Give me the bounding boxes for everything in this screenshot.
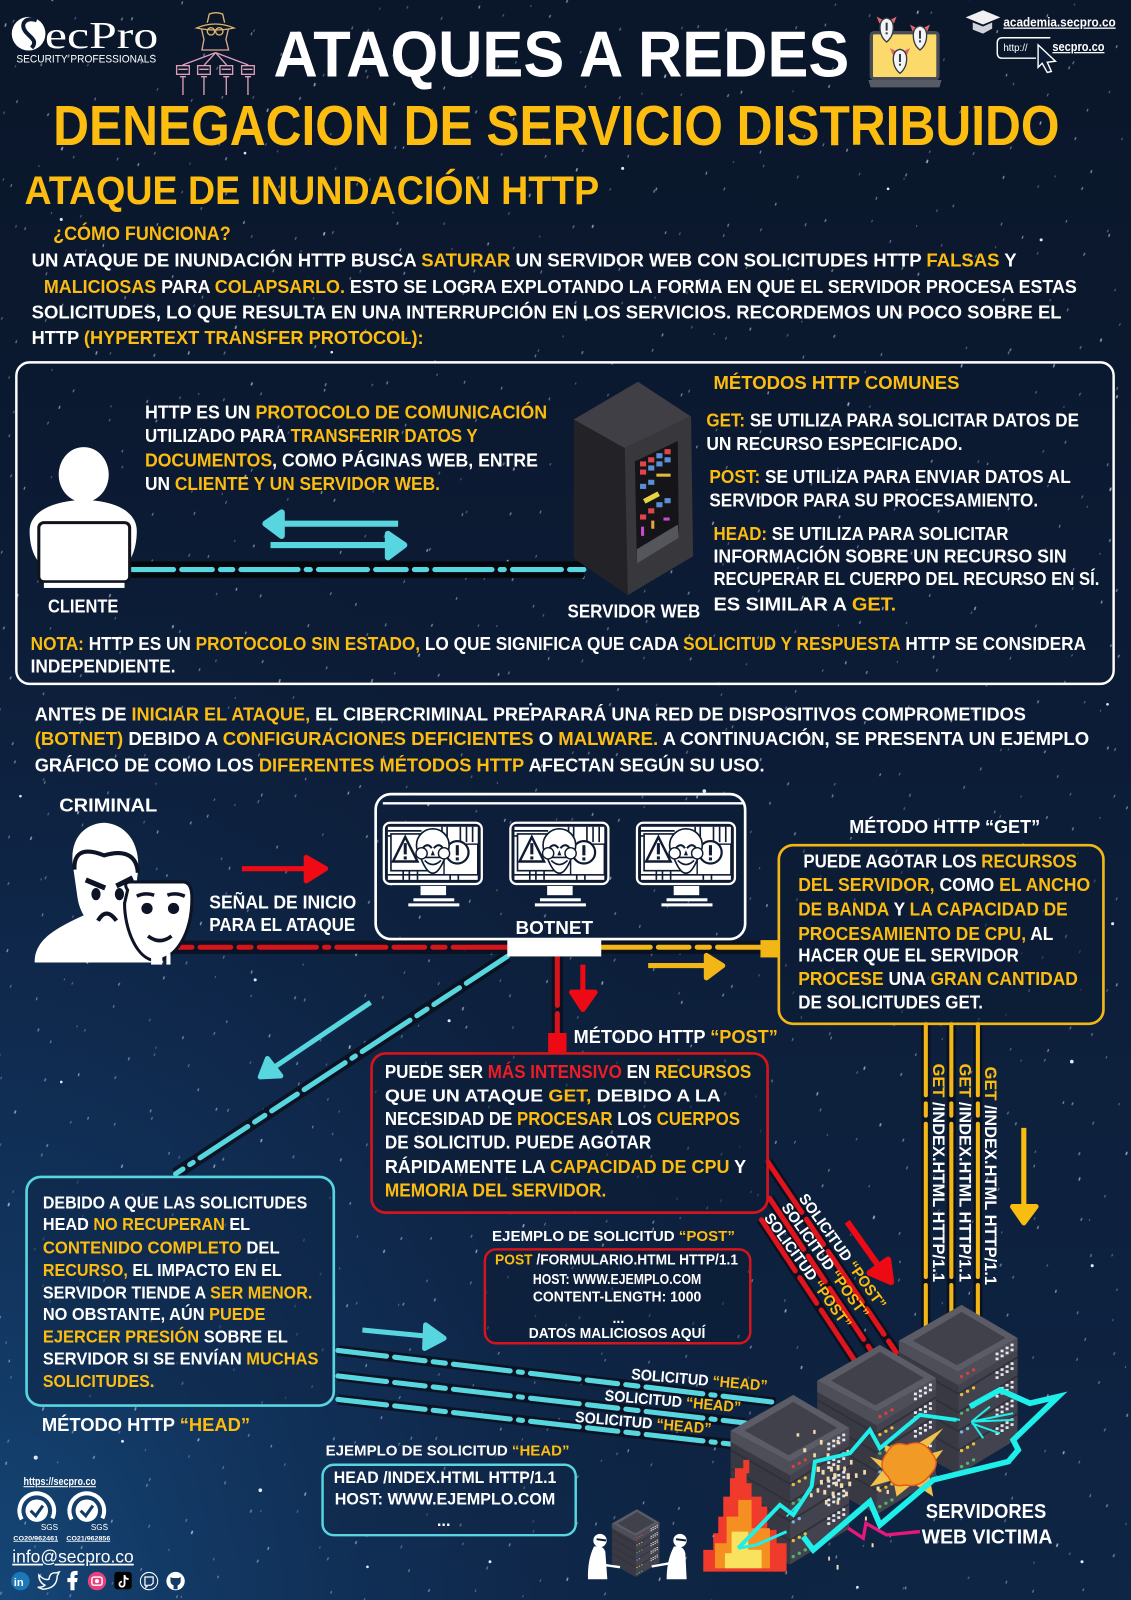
label: servidor web: SERVIDOR WEB (568, 601, 700, 622)
line: cyan botnet to HEAD (176, 956, 507, 1174)
panel: POST method: QUE UN ATAQUE GET, DEBIDO A LA (385, 1085, 721, 1105)
panel: HEAD request example: HOST: WWW.EJEMPLO.COM (335, 1491, 555, 1509)
botnet output node (507, 940, 601, 956)
text block: HTTP description (145, 402, 547, 494)
icon: client at laptop (30, 447, 137, 588)
text block: common HTTP methods: RECUPERAR EL CUERPO DEL RECURSO EN SÍ. (714, 568, 1099, 589)
logo: SecPro: ecPro (45, 15, 158, 57)
panel: GET method: PUEDE AGOTAR LOS RECURSOS (803, 851, 1077, 872)
heading: ataque de inundación HTTP: ATAQUE DE INUNDACIÓN HTTP (25, 167, 599, 213)
labels: HEAD requests: SOLICITUD “HEAD” (630, 1366, 768, 1395)
labels: HEAD requests: SOLICITUD “HEAD” (604, 1387, 742, 1416)
arrow: GET downward (1013, 1128, 1036, 1223)
text block: common HTTP methods: ES SIMILAR A GET. (714, 593, 896, 614)
badge: SGS certificate 2: CO21/962856 (66, 1535, 111, 1542)
text block: note: INDEPENDIENTE. (31, 656, 176, 677)
text block: introduction: MALICIOSAS PARA COLAPSARLO. ESTO SE LOGRA EXPLOTANDO LA FORMA EN QUE EL SERVIDOR PROCESA ESTAS (44, 276, 1077, 297)
text block: introduction: UN ATAQUE DE INUNDACIÓN HTTP BUSCA SATURAR UN SERVIDOR WEB CON SOLICITUDES HTTP FALSAS Y (32, 249, 1017, 270)
panel: HEAD method: RECURSO, EL IMPACTO EN EL (43, 1260, 282, 1280)
label: señal de inicio (209, 891, 356, 935)
text block: common HTTP methods: MÉTODOS HTTP COMUNES (714, 372, 960, 393)
panel: GET method: DE BANDA Y LA CAPACIDAD DE (798, 899, 1068, 920)
label: cliente: CLIENTE (48, 595, 118, 616)
panel: GET method: PROCESE UNA GRAN CANTIDAD (798, 968, 1078, 989)
icon: instagram (88, 1572, 106, 1590)
icon: victim web servers under attack (703, 1305, 1058, 1572)
label: servidores web victima: WEB VICTIMA (922, 1526, 1052, 1548)
text block: introduction (32, 249, 1077, 348)
arrow: response (265, 512, 398, 536)
panel: HEAD method: EJERCER PRESIÓN SOBRE EL (43, 1325, 288, 1346)
panel: HEAD method (27, 1177, 334, 1406)
link: secpro.co: secpro.co (1052, 39, 1105, 54)
icon: hacker controlling network (177, 13, 254, 95)
title: ATAQUES A REDES (274, 18, 849, 91)
panel: POST request example: DATOS MALICIOSOS AQUÍ (529, 1325, 706, 1342)
text block: HTTP description: DOCUMENTOS, COMO PÁGINAS WEB, ENTRE (145, 449, 538, 470)
line: GET vertical requests (926, 1024, 978, 1327)
node: POST (548, 1033, 567, 1053)
panel: GET method: DE SOLICITUDES GET. (798, 991, 983, 1012)
text block: note (31, 633, 1086, 677)
label: señal de inicio: PARA EL ATAQUE (209, 914, 355, 935)
labels: GET requests: GET /INDEX.HTML HTTP/1.1 (981, 1067, 999, 1285)
arrow: POST diagonal (847, 1222, 891, 1282)
logo: SecPro: SECURITY PROFESSIONALS (16, 53, 156, 65)
badge: SGS certificate 1: CO20/962461 (13, 1535, 59, 1542)
text block: before the attack (35, 704, 1089, 776)
text block: introduction: SOLICITUDES, LO QUE RESULTA EN UNA INTERRUPCIÓN EN LOS SERVICIOS. RECORDEMOS UN POCO SOBRE EL (32, 301, 1062, 322)
labels: GET requests: GET /INDEX.HTML HTTP/1.1 (929, 1064, 947, 1282)
panel: POST request example (485, 1249, 750, 1343)
panel: POST method: DE SOLICITUD. PUEDE AGOTAR (385, 1131, 651, 1152)
panel: HEAD method: NO OBSTANTE, AÚN PUEDE (43, 1303, 265, 1324)
panel: POST method: MEMORIA DEL SERVIDOR. (385, 1179, 606, 1200)
icon: linkedin (11, 1572, 30, 1590)
contact email: info@secpro.co (12, 1547, 134, 1567)
panel: HEAD method: HEAD NO RECUPERAN EL (43, 1214, 250, 1234)
panel: POST request example: POST /FORMULARIO.HTML HTTP/1.1 (495, 1253, 738, 1269)
heading: método POST: MÉTODO HTTP “POST” (574, 1026, 778, 1047)
link: secpro.co: http:// (1003, 43, 1028, 54)
text block: before the attack: ANTES DE INICIAR EL ATAQUE, EL CIBERCRIMINAL PREPARARÁ UNA RED DE DISPOSITIVOS COMPROMETIDOS (35, 704, 1026, 725)
arrow: start signal (242, 857, 326, 881)
panel: HEAD method: SERVIDOR SI SE ENVÍAN MUCHAS (43, 1348, 319, 1369)
panel: HEAD method: CONTENIDO COMPLETO DEL (43, 1237, 280, 1257)
icon: web server rack (574, 382, 693, 595)
panel: POST method: PUEDE SER MÁS INTENSIVO EN RECURSOS (385, 1061, 751, 1082)
arrow: to GET (648, 955, 723, 978)
labels: POST requests (760, 1191, 889, 1332)
text block: introduction: HTTP (HYPERTEXT TRANSFER PROTOCOL): (32, 327, 424, 348)
line: botnet to GET (601, 941, 761, 954)
panel: POST request example: ... (612, 1311, 624, 1327)
label: servidores web victima (922, 1501, 1052, 1548)
panel: HEAD method: SERVIDOR TIENDE A SER MENOR. (43, 1282, 312, 1302)
heading: HEAD example: EJEMPLO DE SOLICITUD “HEAD” (326, 1444, 570, 1460)
line: botnet to POST (552, 956, 563, 1036)
connection line client to server (125, 562, 584, 578)
arrow: request (271, 534, 404, 557)
icon: linkedin: in (14, 1577, 24, 1589)
labels: HEAD requests: SOLICITUD “HEAD” (574, 1409, 712, 1438)
line: criminal to botnet (143, 941, 507, 954)
icon: twitch (140, 1572, 158, 1590)
panel: POST request example: HOST: WWW.EJEMPLO.COM (533, 1272, 701, 1288)
node: GET (760, 940, 779, 957)
text block: note: NOTA: HTTP ES UN PROTOCOLO SIN ESTADO, LO QUE SIGNIFICA QUE CADA SOLICITUD Y RESPUESTA HTTP SE CONSIDERA (31, 633, 1086, 654)
social icons (11, 1571, 185, 1590)
link: academia.secpro.co (966, 10, 1116, 34)
icon: facebook (67, 1571, 78, 1590)
badge: SGS certificate 2: SGS (91, 1523, 109, 1532)
heading: método GET: MÉTODO HTTP “GET” (849, 816, 1040, 837)
icon: infected monitor 1 (384, 823, 482, 906)
text block: HTTP description: UN CLIENTE Y UN SERVIDOR WEB. (145, 473, 440, 494)
panel: GET method: PROCESAMIENTO DE CPU, AL (798, 923, 1053, 944)
label: botnet: BOTNET (515, 917, 594, 938)
icon: infected monitor 3 (637, 823, 735, 906)
icon: tiktok (114, 1572, 132, 1589)
text block: before the attack: GRÁFICO DE COMO LOS DIFERENTES MÉTODOS HTTP AFECTAN SEGÚN SU USO. (35, 755, 765, 776)
badge: SGS certificate 1: SGS (41, 1523, 59, 1532)
icon: github (166, 1572, 185, 1590)
panel: HEAD request example: ... (437, 1512, 451, 1530)
icon: twitter (38, 1572, 59, 1589)
text block: HTTP description: HTTP ES UN PROTOCOLO DE COMUNICACIÓN (145, 402, 547, 423)
badge: SGS certificate 2 (63, 1487, 111, 1542)
pink zigzag (848, 1523, 920, 1538)
logo: SecPro (12, 15, 158, 65)
heading: método HEAD: MÉTODO HTTP “HEAD” (42, 1414, 250, 1435)
heading: cómo funciona: ¿CÓMO FUNCIONA? (53, 221, 231, 245)
lightning (738, 1390, 1058, 1550)
panel: HEAD request example: HEAD /INDEX.HTML HTTP/1.1 (334, 1469, 556, 1487)
panel: HEAD method: SOLICITUDES. (43, 1371, 154, 1391)
label: señal de inicio: SEÑAL DE INICIO (209, 891, 356, 912)
heading: POST example: EJEMPLO DE SOLICITUD “POST” (492, 1229, 735, 1245)
explosion (870, 1428, 943, 1497)
text block: common HTTP methods: HEAD: SE UTILIZA PARA SOLICITAR (714, 523, 1008, 544)
arrow: to POST (572, 965, 595, 1010)
icon: attackers around server (588, 1509, 687, 1579)
line: HEAD requests (338, 1350, 776, 1444)
labels: GET requests (929, 1064, 999, 1285)
line: POST diagonal requests (761, 1162, 896, 1362)
labels: POST requests: SOLICITUD “POST” (778, 1200, 872, 1322)
panel: HEAD request example (323, 1465, 576, 1535)
label: servidores web victima: SERVIDORES (926, 1501, 1046, 1523)
text block: before the attack: (BOTNET) DEBIDO A CONFIGURACIONES DEFICIENTES O MALWARE. A CONTINUACIÓN, SE PRESENTA UN EJEMPLO (35, 728, 1089, 749)
link: secpro website: https://secpro.co (23, 1476, 96, 1488)
icon: infected monitor 2 (510, 823, 608, 906)
link: academia.secpro.co: academia.secpro.co (1003, 15, 1116, 30)
text block: common HTTP methods: POST: SE UTILIZA PARA ENVIAR DATOS AL (709, 466, 1071, 487)
arrow: HEAD to servers (362, 1325, 444, 1348)
panel: POST request example: CONTENT-LENGTH: 1000 (533, 1289, 701, 1305)
text block: common HTTP methods: SERVIDOR PARA SU PROCESAMIENTO. (709, 489, 1038, 510)
icon: infected laptop (868, 17, 942, 87)
panel: HEAD method: DEBIDO A QUE LAS SOLICITUDES (43, 1193, 307, 1213)
panel: POST method (372, 1053, 768, 1213)
labels: POST requests: SOLICITUD “POST” (795, 1191, 889, 1313)
arrow: to HEAD (260, 1002, 371, 1077)
panel: HTTP explanation (16, 362, 1114, 684)
labels: GET requests: GET /INDEX.HTML HTTP/1.1 (956, 1064, 974, 1282)
text block: common HTTP methods: UN RECURSO ESPECIFICADO. (706, 433, 963, 454)
panel: GET method: DEL SERVIDOR, COMO EL ANCHO (798, 874, 1090, 895)
badge: SGS certificate 1 (13, 1487, 60, 1542)
label: criminal: CRIMINAL (59, 794, 157, 815)
text block: common HTTP methods (706, 372, 1099, 614)
panel: POST method: RÁPIDAMENTE LA CAPACIDAD DE CPU Y (385, 1156, 746, 1177)
link: secpro.co (997, 38, 1105, 72)
labels: HEAD requests (574, 1366, 768, 1438)
text block: common HTTP methods: INFORMACIÓN SOBRE UN RECURSO SIN (714, 545, 1067, 566)
panel: botnet (376, 794, 745, 939)
labels: POST requests: SOLICITUD “POST” (760, 1210, 854, 1332)
panel: POST method: NECESIDAD DE PROCESAR LOS CUERPOS (385, 1108, 740, 1129)
panel: GET method (779, 845, 1103, 1024)
pixel flame (703, 1460, 787, 1572)
text block: HTTP description: UTILIZADO PARA TRANSFERIR DATOS Y (145, 425, 478, 446)
panel: GET method: HACER QUE EL SERVIDOR (798, 945, 1019, 966)
icon: criminal with mask (35, 823, 192, 965)
text block: common HTTP methods: GET: SE UTILIZA PARA SOLICITAR DATOS DE (706, 410, 1079, 431)
